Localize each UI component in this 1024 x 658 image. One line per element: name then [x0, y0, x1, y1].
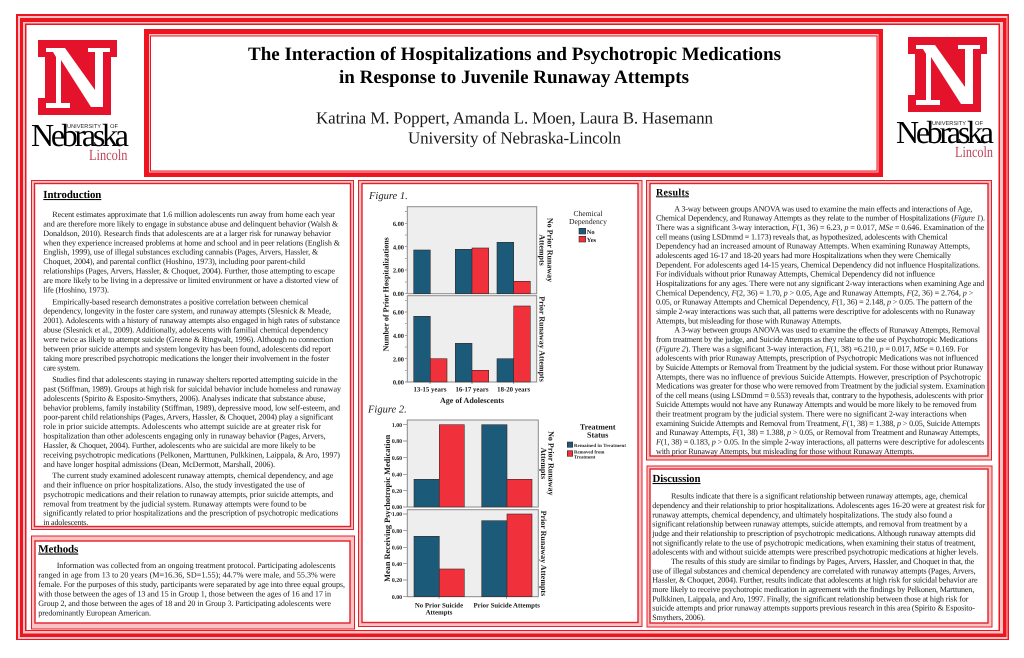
text: results body: Dependency had an increased amount of Runaway Attempts. When examining Runaway Attempts,	[656, 242, 970, 251]
text: introduction body: Donaldson, 2010). Research finds that adolescents are at a larger risk for runaway behavior	[43, 229, 331, 238]
y axis tick labels: 2.00	[393, 356, 404, 363]
text: introduction body: in adolescents.	[43, 518, 88, 527]
legend: chemical dependency: Yes	[587, 237, 597, 244]
y axis tick labels: 6.00	[393, 310, 404, 317]
heading: figure 2: Figure 2.	[367, 404, 407, 415]
panel 1 bars: no prior runaway attempts	[414, 242, 530, 294]
heading: introduction: Introduction	[43, 189, 101, 201]
text: introduction body: abuse (Slesnick et al., 2009). Additionally, adolescents with familial chemical dependency	[43, 326, 329, 335]
x axis labels: 16-17 years	[455, 387, 489, 394]
text: introduction body: Studies find that adolescents staying in runaway shelters reported attempting suicide in the	[52, 375, 338, 384]
strip label: prior runaway attempts: Prior Runaway Attempts	[539, 511, 548, 596]
strip label: prior runaway attempts: Prior Runaway Attempts	[538, 296, 546, 382]
text: introduction body: taking more prescribed psychotropic medications the longer their involvement in the foster	[43, 354, 329, 363]
text: results body: cell means (using LSDmmd = 1.173) reveals that, as hypothesized, adolescents with Chemical	[656, 232, 948, 241]
title	[248, 44, 781, 88]
y axis tick labels: 0.00	[393, 380, 404, 387]
text: introduction body: dependency, longevity in the foster care system, and runaway attempts (Slesnick & Meade,	[43, 307, 331, 316]
chart: figure 2 psychotropic medication	[383, 420, 626, 616]
text: introduction body: poor-parent child relationships (Pages, Arvers, Hassler, & Choquet, 2004) play a significant	[43, 413, 334, 422]
text: introduction body: past (Stiffman, 1989). Groups at high risk for suicidal behavior include homeless and runaway	[43, 384, 342, 393]
legend: treatment status: Removed from	[574, 449, 604, 455]
text: results body: adolescents with prior Runaway Attempts, prescription of Psychotropic Medications was not influenced	[656, 354, 978, 363]
text: introduction body: Empirically-based research demonstrates a positive correlation between chemical	[52, 297, 309, 306]
y axis tick labels: 1.00	[392, 423, 402, 429]
text: results body: F(1, 38) = 0.183, p > 0.05. In the simple 2-way interactions, all patterns were descriptive for adolescents	[655, 438, 984, 447]
y axis tick labels	[393, 221, 404, 387]
text: results body: Chemical Dependency, and Runaway Attempts as they relate to the number of Hospitalizations (Figure 1).	[656, 214, 985, 223]
text: discussion body: Results indicate that there is a significant relationship between runaway attempts, age, chemical	[671, 492, 968, 501]
text: results body: Dependent. For adolescents aged 14-15 years, Chemical Dependency did not influence Hospitalizations.	[656, 260, 980, 269]
text: introduction body: were twice as likely to attempt suicide (Greene & Ringwalt, 1996). Although no connection	[43, 335, 333, 344]
y axis tick labels: 0.00	[392, 595, 402, 601]
text: introduction body: when they experience increased problems at home and school and in peer relations (English &	[43, 238, 341, 247]
text: introduction body: psychotropic medications and their relation to runaway attempts, prior suicide attempts, and	[43, 490, 333, 499]
legend: treatment status: Treatment	[580, 423, 616, 432]
legend: chemical dependency: No	[587, 229, 595, 236]
y axis tick labels: 0.60	[392, 546, 402, 552]
chart: figure 1 hospitalizations by age	[381, 207, 607, 405]
text: discussion body: The results of this study are similar to findings by Pages, Arvers, Hassler, and Choquet in that, the	[671, 557, 975, 566]
title: The Interaction of Hospitalizations and Psychotropic Medications	[248, 44, 781, 65]
text: introduction body: Hassler, & Choquet, 2004). Further, adolescents who are suicidal are more likely to be	[43, 441, 316, 450]
text: introduction body: relationships (Pages, Arvers, Hassler, & Choquet, 2004). Further, those attempting to escape	[43, 267, 335, 276]
text: results body: with prior Runaway Attempts, but misleading for those without Runaway Attempts.	[656, 447, 914, 456]
text: discussion body: dependency and their relationship to prior hospitalizations. Adolescents ages 16-20 were at greatest risk for	[652, 501, 985, 510]
y axis tick labels: 0.20	[392, 578, 402, 584]
text: introduction body: 2001). Adolescents with a history of runaway attempts also engaged in high rates of substance	[43, 316, 340, 325]
y axis tick labels: 0.80	[392, 439, 402, 445]
strip label: no prior runaway attempts: Attempts	[539, 448, 548, 479]
text: introduction body	[43, 210, 342, 527]
text: results body: simple 2-way interactions was such that, all patterns were descriptive for adolescents with no Runaway	[656, 307, 976, 316]
y axis tick labels: 1.00	[392, 512, 402, 518]
text: results body: adolescents aged 16-17 and 18-20 years had more Hospitalizations when they were Chemically	[656, 251, 952, 260]
text: results body: There was a significant 3-way interaction, F(1, 36) = 6.23, p = 0.017, MSe = 0.646. Examination of the	[656, 223, 985, 232]
text: discussion body: significant relationship between runaway attempts, suicide attempts, and removal from treatment by a	[652, 520, 968, 529]
text: discussion body: suicide attempts and prior runaway attempts supports previous research in this area (Spirito & Esposito-	[652, 604, 975, 613]
legend: treatment status: Status	[587, 431, 608, 440]
y axis tick labels: 4.00	[393, 244, 404, 251]
text: introduction body: hospitalization than other adolescents engaging only in runaway behavior (Pages, Arvers,	[43, 432, 326, 441]
strip label: no prior runaway attempts: No Prior Runaway	[546, 431, 556, 495]
text: methods body: Group 2, and those between the ages of 18 and 20 in Group 3. Participating adolescents were	[38, 599, 331, 608]
wordmark: right Lincoln: Lincoln	[955, 144, 993, 161]
panel: discussion	[647, 466, 992, 627]
text: results body: Hospitalizations for any ages. There were not any significant 2-way interactions when examining Age and	[656, 279, 984, 288]
text: introduction body: adolescents (Spirito & Esposito-Smythers, 2006). Analyses indicate that substance abuse,	[43, 394, 326, 403]
wordmark: left Lincoln: Lincoln	[89, 147, 128, 164]
strip label: no prior runaway attempts	[539, 431, 556, 495]
text: results body: Attempts, there was no influence of previous Suicide Attempts. However, prescription of Psychotropic	[656, 372, 981, 381]
logo: right University of Nebraska-Lincoln	[896, 37, 994, 161]
text: discussion body: use of illegal substances and chemical dependency are correlated with runaway attempts (Pages, Arvers,	[652, 566, 976, 575]
y axis title: Number of Prior Hospitalizations	[381, 237, 390, 351]
text: results body: For individuals without prior Runaway Attempts, Chemical Dependency did not influence	[656, 270, 935, 279]
y axis tick labels: 0.20	[392, 489, 402, 495]
heading: results: Results	[656, 187, 689, 198]
text: results body: (Figure 2). There was a significant 3-way interaction, F(1, 38) =6.210, p = 0.017, MSe = 0.169. For	[656, 344, 969, 353]
text: introduction body: receiving psychotropic medications (Pelkonen, Marttunen, Pulkkinen, Laippala, & Aro, 1997)	[43, 450, 340, 459]
panel: results	[646, 180, 992, 460]
x axis labels: 18-20 years	[497, 387, 531, 394]
y axis tick labels: 6.00	[393, 221, 404, 228]
legend: chemical dependency: Dependency	[569, 217, 607, 226]
text: methods body	[38, 561, 345, 617]
x axis labels: No Prior Suicide	[415, 602, 463, 609]
authors and affiliation: Katrina M. Poppert, Amanda L. Moen, Laura B. Hasemann	[316, 108, 714, 128]
text: results body: examining Suicide Attempts and Removal from Treatment, F(1, 38) = 1.388, p > 0.05, Suicide Attempts	[656, 419, 980, 428]
text: introduction body: and are therefore more likely to engage in substance abuse and delinquent behavior (Walsh &	[43, 219, 339, 228]
legend: treatment status	[567, 423, 626, 461]
panel: figures	[358, 180, 642, 626]
y axis tick labels: 2.00	[393, 268, 404, 275]
text: discussion body: runaway attempts, chemical dependency, and ultimately hospitalizations. The study also found a	[652, 510, 953, 519]
text: discussion body: adolescents with and without suicide attempts were prescribed psychotropic medications at higher levels.	[652, 548, 978, 557]
text: results body: from treatment by the judge, and Suicide Attempts as they relate to the use of Psychotropic Medications	[656, 335, 978, 344]
text: introduction body: role in prior suicide attempts. Adolescents who attempt suicide are at greater risk for	[43, 422, 321, 431]
y axis tick labels: 0.00	[393, 291, 404, 298]
panel: methods	[32, 536, 354, 629]
text: results body: their treatment program by the judicial system. There were no significant 2-way interactions when	[656, 410, 967, 419]
y axis tick labels	[392, 423, 402, 601]
text: introduction body: Recent estimates approximate that 1.6 million adolescents run away from home each year	[52, 210, 335, 219]
text: methods body: predominantly European American.	[38, 608, 151, 617]
strip label: no prior runaway attempts: Attempts	[538, 234, 546, 266]
heading: discussion: Discussion	[652, 473, 700, 485]
x axis labels	[415, 602, 540, 616]
y axis title: Mean Receiving Psychotropic Medication	[383, 434, 392, 582]
panel 1 bars: no prior runaway attempts	[414, 425, 532, 507]
legend: treatment status: Treatment	[574, 455, 596, 461]
text: results body: Suicide Attempts would not have any Runaway Attempts and would be more likely to be removed from	[656, 400, 977, 409]
text: results body: Attempts, but misleading for those with Runaway Attempts.	[656, 316, 842, 325]
y axis tick labels: 0.60	[392, 456, 402, 462]
wordmark: right of: OF	[975, 121, 984, 127]
text: discussion body	[651, 492, 985, 622]
wordmark: right University of: UNIVERSITY	[932, 121, 966, 127]
wordmark: left Nebraska: Nebraska	[31, 117, 129, 153]
text: discussion body: Pulkkinen, Laippala, and Aro, 1997. Finally, the significant relationship between those at high risk for	[652, 594, 969, 603]
wordmark: right Nebraska: Nebraska	[896, 114, 994, 150]
y axis tick labels: 0.80	[392, 529, 402, 535]
heading: figure 1: Figure 1.	[368, 191, 408, 202]
text: introduction body: removal from treatment by the judicial system. Runaway attempts were found to be	[43, 499, 307, 508]
text: introduction body: and their influence on prior hospitalizations. Also, the study investigated the use of	[43, 480, 305, 489]
authors and affiliation	[316, 108, 714, 148]
heading: methods: Methods	[38, 544, 79, 556]
text: introduction body: Choquet, 2004), and parental conflict (Hoshino, 1973), including poor parent-child	[43, 257, 305, 266]
text: results body	[655, 204, 985, 456]
text: introduction body: significantly related to prior hospitalizations and the prescription of psychotropic medications	[43, 509, 338, 518]
text: discussion body: Hassler, & Choquet, 2004). Further, results indicate that adolescents at high risk for suicidal behavior are	[652, 576, 978, 585]
icon: left block N	[38, 40, 117, 115]
text: introduction body: are more likely to be living in a depressive or limited environment or have a distorted view of	[43, 276, 339, 285]
text: introduction body: between prior suicide attempts and system longevity has been found, adolescents did report	[43, 345, 332, 354]
text: introduction body: behavior problems, family instability (Stiffman, 1989), depressive mood, low self-esteem, and	[43, 403, 340, 412]
text: results body: Medications was greater for those who were removed from Treatment by the judicial system. Examination	[656, 382, 985, 391]
text: introduction body: life (Hoshino, 1973).	[43, 285, 109, 294]
text: discussion body: judge and their relationship to prescription of psychotropic medications. Although runaway attempts did	[651, 529, 976, 538]
panel 2 bars: prior runaway attempts	[414, 514, 532, 597]
authors and affiliation: University of Nebraska-Lincoln	[408, 128, 622, 148]
y axis tick labels: 4.00	[393, 333, 404, 340]
strip label: no prior runaway attempts	[538, 218, 554, 282]
text: methods body: ranged in age from 13 to 20 years (M=16.36, SD=1.55); 44.7% were male, and 55.3% were	[38, 570, 336, 579]
text: discussion body: not significantly relate to the use of psychotropic medications, when examining their status of treatment,	[652, 538, 976, 547]
text: methods body: with those between the ages of 13 and 15 in Group 1, those between the ages of 16 and 17 in	[38, 589, 331, 598]
x axis labels: Attempts	[426, 609, 453, 616]
y axis tick labels: 0.40	[392, 562, 402, 568]
title: in Response to Juvenile Runaway Attempts	[339, 67, 689, 88]
text: introduction body: and have longer hospital admissions (Dean, McDermott, Marshall, 2006).	[43, 460, 275, 469]
text: introduction body: care system.	[43, 363, 80, 372]
text: results body: Chemical Dependency, F(2, 36) = 1.70, p > 0.05, Age and Runaway Attempts, F(2, 36) = 2.764, p >	[656, 288, 974, 297]
x axis labels: 13-15 years	[413, 387, 447, 394]
text: discussion body: Smythers, 2006).	[652, 613, 705, 622]
text: results body: 0.05, or Runaway Attempts and Chemical Dependency, F(1, 36) = 2.148, p > 0.05. The pattern of the	[656, 298, 973, 307]
text: introduction body: English, 1999), use of illegal substances excluding cannabis (Pages, Arvers, Hassler, &	[43, 248, 319, 257]
legend: chemical dependency	[569, 209, 607, 244]
panel: introduction	[32, 180, 354, 530]
text: results body: of the cell means (using LSDmmd = 0.553) reveals that, contrary to the hypothesis, adolescents with prior	[656, 391, 984, 400]
strip label: no prior runaway attempts: No Prior Runaway	[546, 218, 554, 282]
panel: title box	[144, 29, 883, 177]
text: results body: and Runaway Attempts, F(1, 38) = 1.388, p > 0.05, or Removal from Treatment and Runaway Attempts,	[656, 428, 980, 437]
icon: right block N	[908, 37, 987, 112]
text: results body: A 3-way between groups ANOVA was used to examine the main effects and interactions of Age,	[674, 204, 972, 213]
text: results body: A 3-way between groups ANOVA was used to examine the effects of Runaway Attempts, Removal	[674, 326, 981, 335]
text: introduction body: The current study examined adolescent runaway attempts, chemical dependency, and age	[52, 471, 334, 480]
x axis labels: Prior Suicide Attempts	[474, 602, 540, 609]
y axis tick labels: 0.40	[392, 472, 402, 478]
y axis tick labels: 0.00	[392, 505, 402, 511]
wordmark: left of: OF	[110, 124, 119, 130]
panel 2 bars: prior runaway attempts	[414, 306, 530, 382]
x axis title: Age of Adolescents	[440, 396, 504, 405]
wordmark: left University of: UNIVERSITY	[67, 124, 101, 130]
text: results body: by Suicide Attempts or Removal from Treatment by the judicial system. For those without prior Runaway	[656, 363, 984, 372]
legend: treatment status: Remained in Treatment	[574, 443, 626, 449]
x axis labels	[413, 387, 531, 394]
text: discussion body: more likely to receive psychotropic medication in agreement with the findings by Pelkonen, Marttunen,	[652, 585, 974, 594]
text: methods body: Information was collected from an ongoing treatment protocol. Participating adolescents	[57, 561, 336, 570]
text: methods body: female. For the purposes of this study, participants were separated by age into three equal groups,	[38, 580, 345, 589]
logo: left University of Nebraska-Lincoln	[31, 40, 129, 164]
legend: chemical dependency: Chemical	[573, 209, 603, 218]
